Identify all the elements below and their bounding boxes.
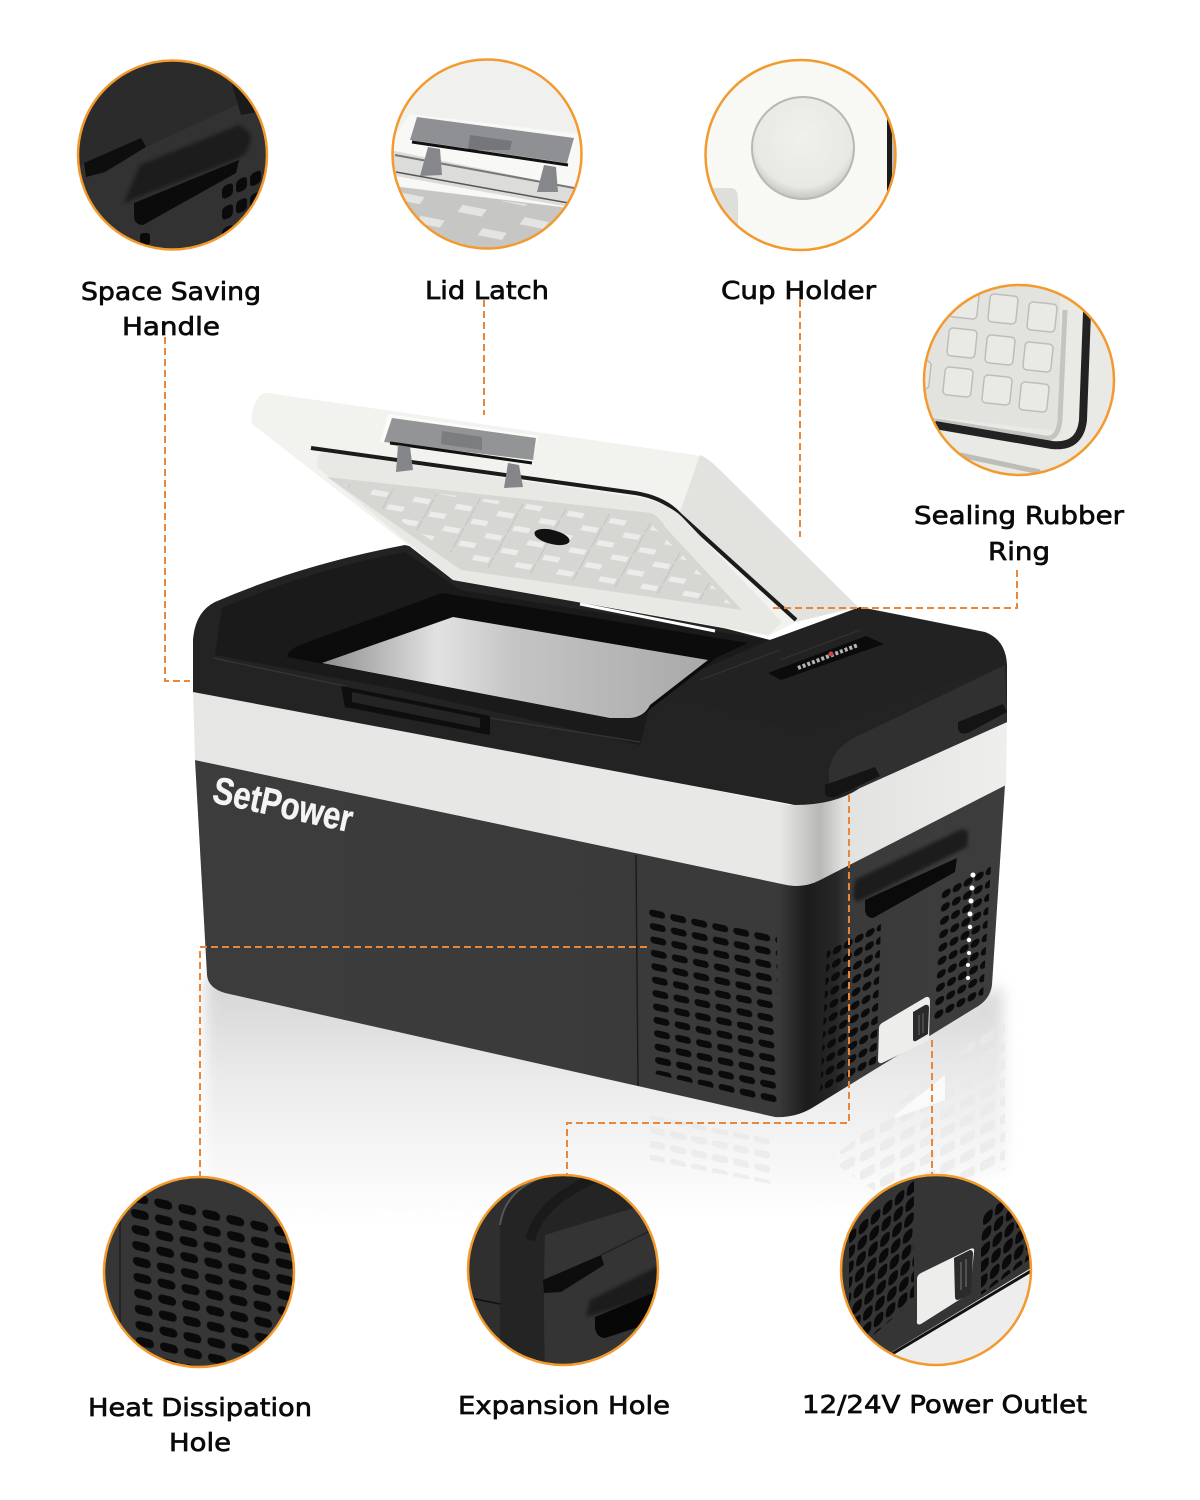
callout: space saving handle <box>76 59 268 251</box>
right control block <box>654 610 1004 732</box>
label: space saving handle: Space Saving <box>81 277 261 306</box>
callout: sealing rubber ring <box>922 284 1116 476</box>
floor reflection <box>205 975 1008 1225</box>
side carry handle <box>853 830 968 918</box>
label: heat dissipation hole: Heat Dissipation <box>88 1393 312 1422</box>
body lower shell <box>195 760 1005 1117</box>
power outlet plate <box>878 997 930 1063</box>
gasket <box>311 448 796 620</box>
callout: lid latch <box>390 55 585 260</box>
label: heat dissipation hole: Hole <box>169 1428 231 1457</box>
callout: cup holder <box>700 55 900 255</box>
lid <box>252 393 858 636</box>
lid side face <box>680 455 858 622</box>
control display <box>700 630 884 680</box>
side vent slots right <box>933 865 991 1026</box>
tray grid <box>327 477 742 610</box>
front vent slots <box>647 905 779 1104</box>
callout: heat dissipation hole <box>102 1176 296 1368</box>
label: sealing rubber ring: Sealing Rubber <box>914 501 1125 530</box>
label: sealing rubber ring: Ring <box>988 537 1050 566</box>
inner tray <box>317 452 782 635</box>
label: expansion hole: Expansion Hole <box>458 1391 670 1420</box>
compressor panel seam <box>636 855 638 1086</box>
front handle recess <box>341 686 490 735</box>
side panel <box>829 665 1007 788</box>
label: 12/24V power outlet: 12/24V Power Outlet <box>802 1390 1087 1419</box>
side vent slots left <box>820 924 881 1094</box>
logo clips <box>825 704 1007 797</box>
label: cup holder: Cup Holder <box>721 276 877 305</box>
leader lines <box>165 300 1017 1178</box>
white band <box>193 688 1007 886</box>
latch <box>380 414 538 488</box>
light through vents <box>966 872 976 980</box>
cup holder hole <box>533 526 571 548</box>
brand name: SetPower <box>209 770 357 841</box>
top surface <box>215 552 1003 745</box>
product: portable fridge <box>193 393 1007 1117</box>
label: space saving handle: Handle <box>122 312 220 341</box>
callout: expansion hole <box>465 1172 661 1370</box>
hinge highlight <box>580 604 715 631</box>
cavity interior <box>322 617 708 718</box>
black top housing <box>193 545 1007 805</box>
lid outer shell <box>252 393 858 636</box>
cavity rim <box>287 593 748 718</box>
label: lid latch: Lid Latch <box>425 276 549 305</box>
front rim crease <box>213 658 654 742</box>
callout: 12/24V power outlet <box>838 1170 1036 1370</box>
